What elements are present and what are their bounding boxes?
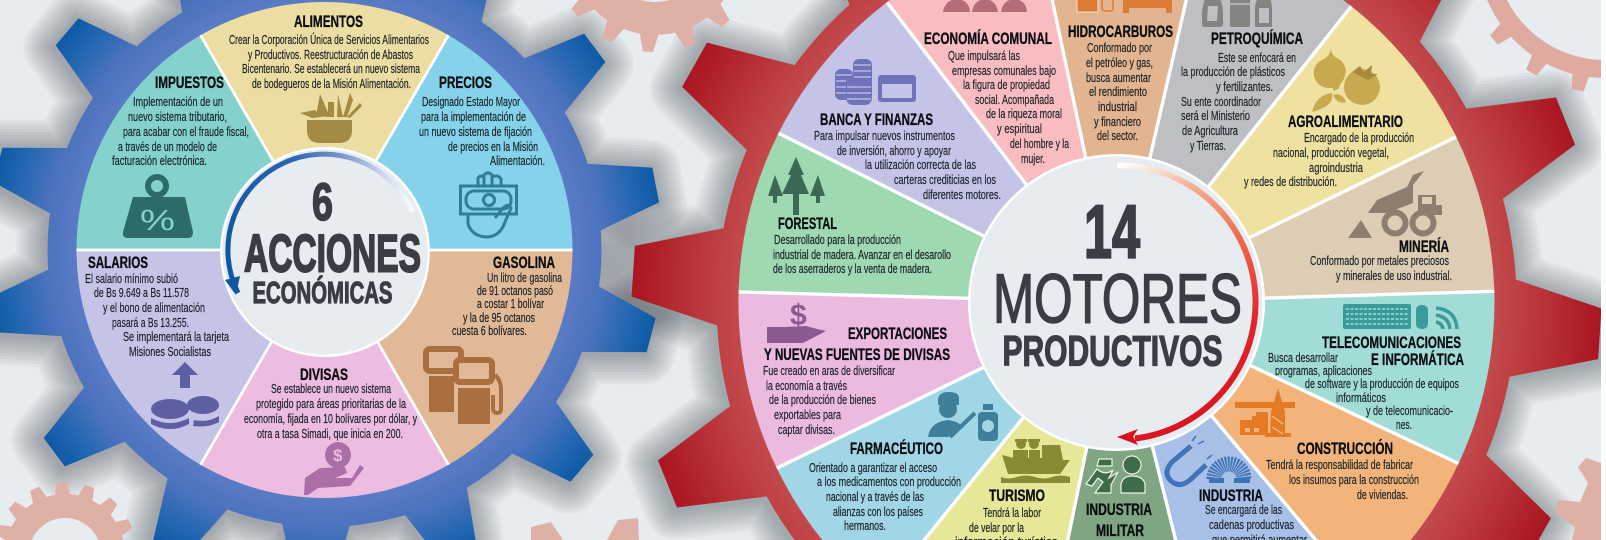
text: impuestos: facturación electrónica. (112, 153, 207, 168)
panel: farmacéutico (777, 302, 1116, 540)
text: telecomunicaciones (1268, 350, 1459, 432)
icon: soldier and person (1086, 456, 1145, 493)
heading: industria militar: MILITAR (1096, 521, 1144, 540)
text: divisas (244, 381, 417, 441)
icon: community people (943, 0, 1027, 12)
text: precios: Alimentación. (490, 153, 545, 168)
text: construcción: los insumos para la construcción (1289, 472, 1419, 487)
text: exportaciones: exportables para (774, 407, 842, 422)
text: gasolina: de 91 octanos pasó (477, 283, 553, 298)
text: salarios: El salario mínimo subió (85, 271, 178, 286)
text: minería (1310, 253, 1452, 283)
heading: economía comunal: ECONOMÍA COMUNAL (924, 29, 1052, 48)
text: alimentos: Bicentenario. Se establecerá un nuevo sistema (242, 61, 421, 76)
text: banca y finanzas: de inversión, ahorro y apoyar (837, 143, 951, 158)
text: hidrocarburos: Conformado por (1087, 40, 1152, 55)
heading: salarios: SALARIOS (88, 253, 148, 272)
text: construcción: de viviendas. (1357, 487, 1408, 502)
panel: minería (1116, 137, 1494, 302)
icon: magnet and spring (1167, 436, 1250, 484)
panel: agroalimentario (1116, 6, 1456, 303)
text: minería: y minerales de uso industrial. (1336, 268, 1452, 283)
text: salarios: Misiones Socialistas (129, 344, 211, 359)
heading: construcción: CONSTRUCCIÓN (1297, 439, 1393, 458)
text: impuestos: Implementación de un (133, 94, 223, 109)
text: forestal: Desarrollado para la producción (774, 232, 901, 247)
heading: alimentos: ALIMENTOS (294, 12, 363, 31)
text: precios: Designado Estado Mayor (422, 94, 520, 109)
icon: keyboard, mouse and wifi (1343, 304, 1457, 329)
heading: exportaciones (764, 324, 950, 364)
heading: industria: INDUSTRIA (1199, 486, 1263, 505)
text: turismo: de velar por la (969, 520, 1025, 535)
text: salarios: y el bono de alimentación (103, 300, 205, 315)
text: economía comunal: del hombre y la (1010, 136, 1070, 151)
text: salarios: de Bs 9.649 a Bs 11.578 (94, 285, 189, 300)
heading: gasolina: GASOLINA (493, 253, 555, 272)
text: agroalimentario: y redes de distribución. (1244, 174, 1337, 189)
text: divisas: Se establece un nuevo sistema (271, 381, 392, 396)
icon: hand with dollar (767, 299, 826, 343)
text: exportaciones: la economía a través (766, 378, 847, 393)
text: economía comunal: mujer. (1021, 151, 1045, 166)
icon: weight with percent (123, 177, 193, 238)
panel: industria militar (1040, 302, 1208, 540)
panel: forestal (739, 133, 1116, 302)
title: 14 motores productivos: PRODUCTIVOS (1002, 328, 1222, 376)
text: telecomunicaciones: programas, aplicaciones (1275, 363, 1372, 378)
heading: turismo: TURISMO (989, 486, 1045, 505)
text: petroquímica: y Tierras. (1190, 138, 1226, 153)
text: petroquímica: de Agricultura (1182, 123, 1239, 138)
icon: fuel pumps (426, 349, 501, 424)
title: 6 acciones económicas: ACCIONES (244, 224, 421, 284)
text: economía comunal: empresas comunales bajo (952, 63, 1056, 78)
text: impuestos: a través de un modelo de (118, 139, 217, 154)
heading: telecomunicaciones e informática (1322, 333, 1464, 369)
text: divisas: protegido para áreas prioritarias de la (256, 396, 407, 411)
text: gasolina: a costar 1 bolívar (477, 296, 544, 311)
text: hidrocarburos: del sector. (1097, 128, 1138, 143)
arrow: red circular arrow (1117, 165, 1256, 445)
text: forestal (773, 232, 951, 276)
text: farmacéutico (809, 460, 961, 533)
icon: nurse, syringe and bottle (928, 392, 998, 441)
text: farmacéutico: hermanos. (844, 518, 886, 533)
text: precios: un nuevo sistema de fijación (419, 124, 532, 139)
text: exportaciones: captar divisas. (778, 422, 835, 437)
icon: hand with coin: $ (333, 446, 343, 465)
text: industria: cadenas productivas (1209, 517, 1294, 532)
text: industria: Se encargará de las (1205, 502, 1282, 517)
heading: agroalimentario: AGROALIMENTARIO (1288, 112, 1403, 131)
text: salarios (85, 271, 230, 359)
text: hidrocarburos: industrial (1098, 99, 1137, 114)
text: precios: de precios en la Misión (448, 139, 538, 154)
heading: hidrocarburos: HIDROCARBUROS (1068, 22, 1173, 41)
text: salarios: Se implementará la tarjeta (123, 329, 230, 344)
text: telecomunicaciones: y de telecomunicacio- (1366, 403, 1453, 418)
text: agroalimentario: agroindustria (1309, 160, 1364, 175)
text: farmacéutico: Orientado a garantizar el acceso (809, 460, 937, 475)
text: hidrocarburos (1086, 40, 1153, 143)
background gear: top centre (554, 0, 753, 52)
heading: impuestos: IMPUESTOS (155, 73, 224, 92)
text: banca y finanzas: diferentes motores. (923, 187, 1001, 202)
text: exportaciones (763, 363, 895, 437)
text: forestal: industrial de madera. Avanzar en el desarollo (773, 247, 951, 262)
text: alimentos: y Productivos. Reestructuración de Abastos (248, 47, 413, 62)
text: salarios: pasará a Bs 13.255. (112, 315, 189, 330)
text: farmacéutico: nacional y a través de las (826, 489, 924, 504)
icon: oil equipment (1077, 0, 1172, 13)
text: construcción (1266, 457, 1419, 502)
text: banca y finanzas: Para impulsar nuevos instrumentos (814, 128, 955, 143)
panel: hidrocarburos (1038, 0, 1202, 302)
text: economía comunal (948, 48, 1070, 166)
text: banca y finanzas: la utilización correcta de las (865, 157, 976, 172)
hub: 14 motores productivos (968, 154, 1265, 451)
icon: boat with tourists (1001, 439, 1070, 483)
text: turismo (955, 505, 1059, 540)
background gear: top right (1486, 0, 1606, 93)
text: gasolina: y la de 95 octanos (463, 310, 535, 325)
heading: minería: MINERÍA (1399, 237, 1449, 256)
heading: exportaciones: Y NUEVAS FUENTES DE DIVISAS (764, 345, 950, 364)
heading: farmacéutico: FARMACÉUTICO (850, 439, 943, 458)
text: precios (419, 94, 545, 168)
icon: crane and building (1235, 388, 1295, 437)
panel: banca y finanzas (778, 2, 1116, 302)
text: economía comunal: y espiritual (997, 121, 1042, 136)
text: banca y finanzas (814, 128, 1001, 202)
heading: banca y finanzas: BANCA Y FINANZAS (820, 110, 933, 129)
icon: weight with percent: % (140, 205, 175, 237)
icon: hand with dollar: $ (790, 299, 807, 332)
text: petroquímica (1181, 50, 1296, 153)
text: economía comunal: de la riqueza moral (986, 106, 1062, 121)
text: hidrocarburos: el rendimiento (1089, 84, 1147, 99)
panel: salarios (76, 250, 324, 465)
text: forestal: de los aserraderos y la venta de madera. (773, 261, 932, 276)
background gear: bottom right (1555, 458, 1601, 540)
text: gasolina (452, 270, 563, 338)
panel: alimentos (200, 2, 448, 250)
icon: plastic bottles (1202, 0, 1272, 27)
panel: economía comunal (887, 0, 1116, 303)
heading: precios: PRECIOS (439, 73, 492, 92)
heading: industria militar (1086, 500, 1152, 540)
text: petroquímica: será el Ministerio (1181, 108, 1250, 123)
title: 6 acciones económicas: 6 (312, 173, 333, 232)
heading: exportaciones: EXPORTACIONES (848, 324, 947, 343)
text: petroquímica: la producción de plásticos (1181, 64, 1285, 79)
hub: 6 acciones económicas (220, 147, 430, 357)
text: petroquímica: y fertilizantes. (1216, 79, 1273, 94)
text: minería: Conformado por metales preciosos (1310, 253, 1449, 268)
title: 14 motores productivos: 14 (1084, 190, 1140, 274)
text: impuestos: para acabar con el fraude fiscal, (123, 124, 249, 139)
text: agroalimentario (1244, 130, 1414, 189)
background gear: bottom left (0, 482, 137, 540)
text: impuestos: nuevo sistema tributario, (128, 109, 227, 124)
icon: dump truck (1348, 171, 1442, 238)
gear: 14 motores productivos (red) (630, 0, 1603, 540)
panel: industria (1116, 302, 1360, 540)
text: exportaciones: de la producción de bienes (769, 392, 876, 407)
panel: construcción (1116, 302, 1458, 540)
text: hidrocarburos: el petróleo y gas, (1086, 55, 1153, 70)
heading: forestal: FORESTAL (778, 214, 837, 233)
icon: coin stacks and card (835, 59, 916, 105)
text: gasolina: Un litro de gasolina (487, 270, 563, 285)
heading: telecomunicaciones e informática: TELECOMUNICACIONES (1322, 333, 1461, 352)
text: divisas: otra a tasa Simadi, que inicia en 200. (257, 426, 403, 441)
text: petroquímica: Este se enfocará en (1218, 50, 1296, 65)
text: precios: para la implementación de (421, 109, 526, 124)
text: divisas: economía, fijada en 10 bolívares por dólar, y (244, 411, 417, 426)
arrow: blue circular arrow (225, 154, 412, 295)
icon: hand holding money (460, 173, 516, 237)
text: economía comunal: Que impulsará las (948, 48, 1020, 63)
text: petroquímica: Su ente coordinador (1181, 94, 1261, 109)
text: hidrocarburos: y financiero (1094, 114, 1141, 129)
background gear: bottom centre teeth (531, 518, 639, 540)
panel: impuestos (76, 35, 324, 250)
title: 14 motores productivos (993, 190, 1242, 376)
text: telecomunicaciones: informáticos (1336, 390, 1386, 405)
title: 14 motores productivos: MOTORES (993, 260, 1242, 338)
text: agroalimentario: Encargado de la producción (1304, 130, 1414, 145)
text: economía comunal: social. Acompañada (975, 92, 1055, 107)
panel: telecomunicaciones e informática (1116, 291, 1494, 464)
text: hidrocarburos: busca aumentar (1086, 70, 1151, 85)
panel dividers: red gear (739, 0, 1494, 540)
panel: exportaciones (738, 292, 1116, 468)
panel: gasolina (324, 250, 573, 465)
icon: food basket (300, 93, 362, 143)
icon: coins and arrow (151, 362, 219, 429)
text: exportaciones: Fue creado en aras de diversificar (763, 363, 895, 378)
heading: telecomunicaciones e informática: E INFORMÁTICA (1371, 350, 1464, 369)
text: alimentos: Crear la Corporación Única de Servicios Alimentarios (229, 32, 429, 47)
icon: pine trees (768, 157, 825, 215)
text: industria (1205, 502, 1307, 540)
icon: hand with coin (304, 442, 364, 495)
text: alimentos (229, 32, 429, 91)
panel: precios (324, 35, 572, 250)
text: gasolina: cuesta 6 bolívares. (452, 323, 527, 338)
text: impuestos (112, 94, 249, 168)
panel: petroquímica (1116, 0, 1351, 302)
text: turismo: Tendrá la labor (983, 505, 1041, 520)
panel: divisas (200, 250, 448, 498)
title: 6 acciones económicas (244, 173, 421, 310)
heading: industria militar: INDUSTRIA (1086, 500, 1152, 519)
text: construcción: Tendrá la responsabilidad de fabricar (1266, 457, 1413, 472)
text: telecomunicaciones: Busca desarrollar (1268, 350, 1338, 365)
text: economía comunal: la figura de propiedad (963, 77, 1050, 92)
text: farmacéutico: alianzas con los países (833, 504, 923, 519)
text: farmacéutico: a los medicamentos con producción (817, 474, 961, 489)
text: telecomunicaciones: de software y la producción de equipos (1305, 376, 1459, 391)
text: banca y finanzas: carteras crediticias en los (894, 172, 996, 187)
panel dividers: blue gear (76, 35, 572, 465)
title: 6 acciones económicas: ECONÓMICAS (252, 274, 392, 310)
text: telecomunicaciones: nes. (1396, 417, 1412, 432)
gear: seis acciones económicas (blue) (0, 0, 662, 540)
text: alimentos: de bodegueros de la Misión Alimentación. (252, 76, 411, 91)
heading: petroquímica: PETROQUÍMICA (1211, 29, 1303, 48)
panel: turismo (879, 302, 1116, 540)
heading: divisas: DIVISAS (300, 365, 348, 384)
icon: onion, tomato and leaves (1312, 48, 1380, 112)
text: agroalimentario: nacional, producción vegetal, (1273, 145, 1389, 160)
